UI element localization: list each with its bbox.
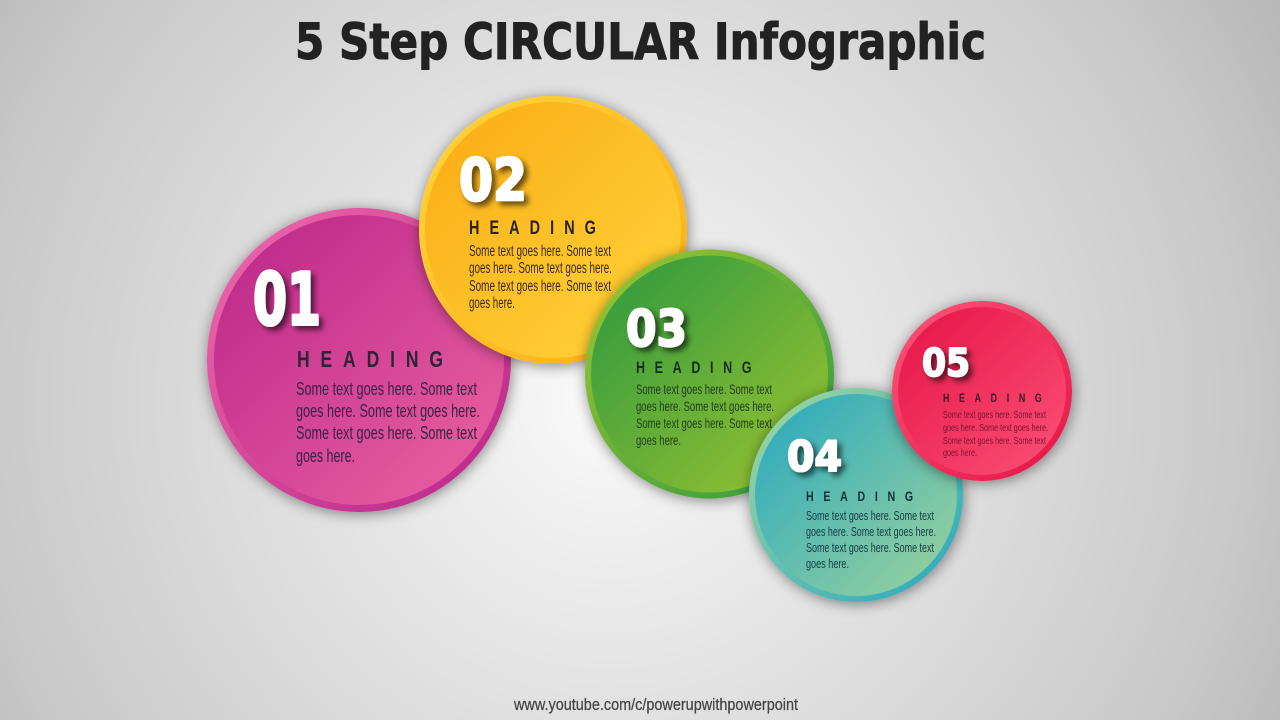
number 03: 03 <box>626 300 687 358</box>
body text 01 <box>296 379 480 466</box>
body text 02: Some text goes here. Some text <box>469 243 611 260</box>
footer url: www.youtube.com/c/powerupwithpowerpoint <box>513 695 798 714</box>
body text 04: goes here. Some text goes here. <box>806 524 936 539</box>
body text 02: goes here. <box>469 295 515 312</box>
number 01: 01 <box>253 258 321 342</box>
body text 04: goes here. <box>806 556 849 571</box>
heading 05: HEADING <box>943 393 1042 405</box>
heading 01: HEADING <box>297 348 443 373</box>
body text 02: Some text goes here. Some text <box>469 278 611 295</box>
body text 03: goes here. <box>636 432 681 448</box>
body text 01: goes here. Some text goes here. <box>296 401 480 421</box>
body text 05: Some text goes here. Some text <box>943 435 1046 447</box>
body text 02 <box>469 243 612 312</box>
heading 02: HEADING <box>469 217 596 239</box>
body text 03: Some text goes here. Some text <box>636 381 772 397</box>
number 05: 05 <box>922 341 970 385</box>
heading 03: HEADING <box>636 359 752 378</box>
panel: step 04 <box>749 388 963 602</box>
panel: step 05 <box>892 301 1072 481</box>
body text 05: goes here. Some text goes here. <box>943 422 1048 434</box>
body text 03 <box>636 381 774 448</box>
body text 05: goes here. <box>943 447 977 459</box>
panel: step 01 <box>207 208 511 512</box>
heading 04: HEADING <box>806 489 913 504</box>
body text 02: goes here. Some text goes here. <box>469 260 612 277</box>
body text 04 <box>806 508 936 571</box>
title: 5 Step CIRCULAR Infographic <box>295 13 986 71</box>
body text 01: goes here. <box>296 446 355 466</box>
number 04: 04 <box>787 432 842 481</box>
number 02: 02 <box>459 146 527 214</box>
body text 05: Some text goes here. Some text <box>943 409 1046 421</box>
panel: step 03 <box>585 250 834 498</box>
body text 03: Some text goes here. Some text <box>636 415 772 431</box>
panel: step 02 <box>419 96 687 364</box>
body text 04: Some text goes here. Some text <box>806 540 934 555</box>
body text 03: goes here. Some text goes here. <box>636 398 774 414</box>
body text 04: Some text goes here. Some text <box>806 508 934 523</box>
body text 01: Some text goes here. Some text <box>296 423 477 443</box>
body text 05 <box>943 409 1048 459</box>
body text 01: Some text goes here. Some text <box>296 379 477 399</box>
